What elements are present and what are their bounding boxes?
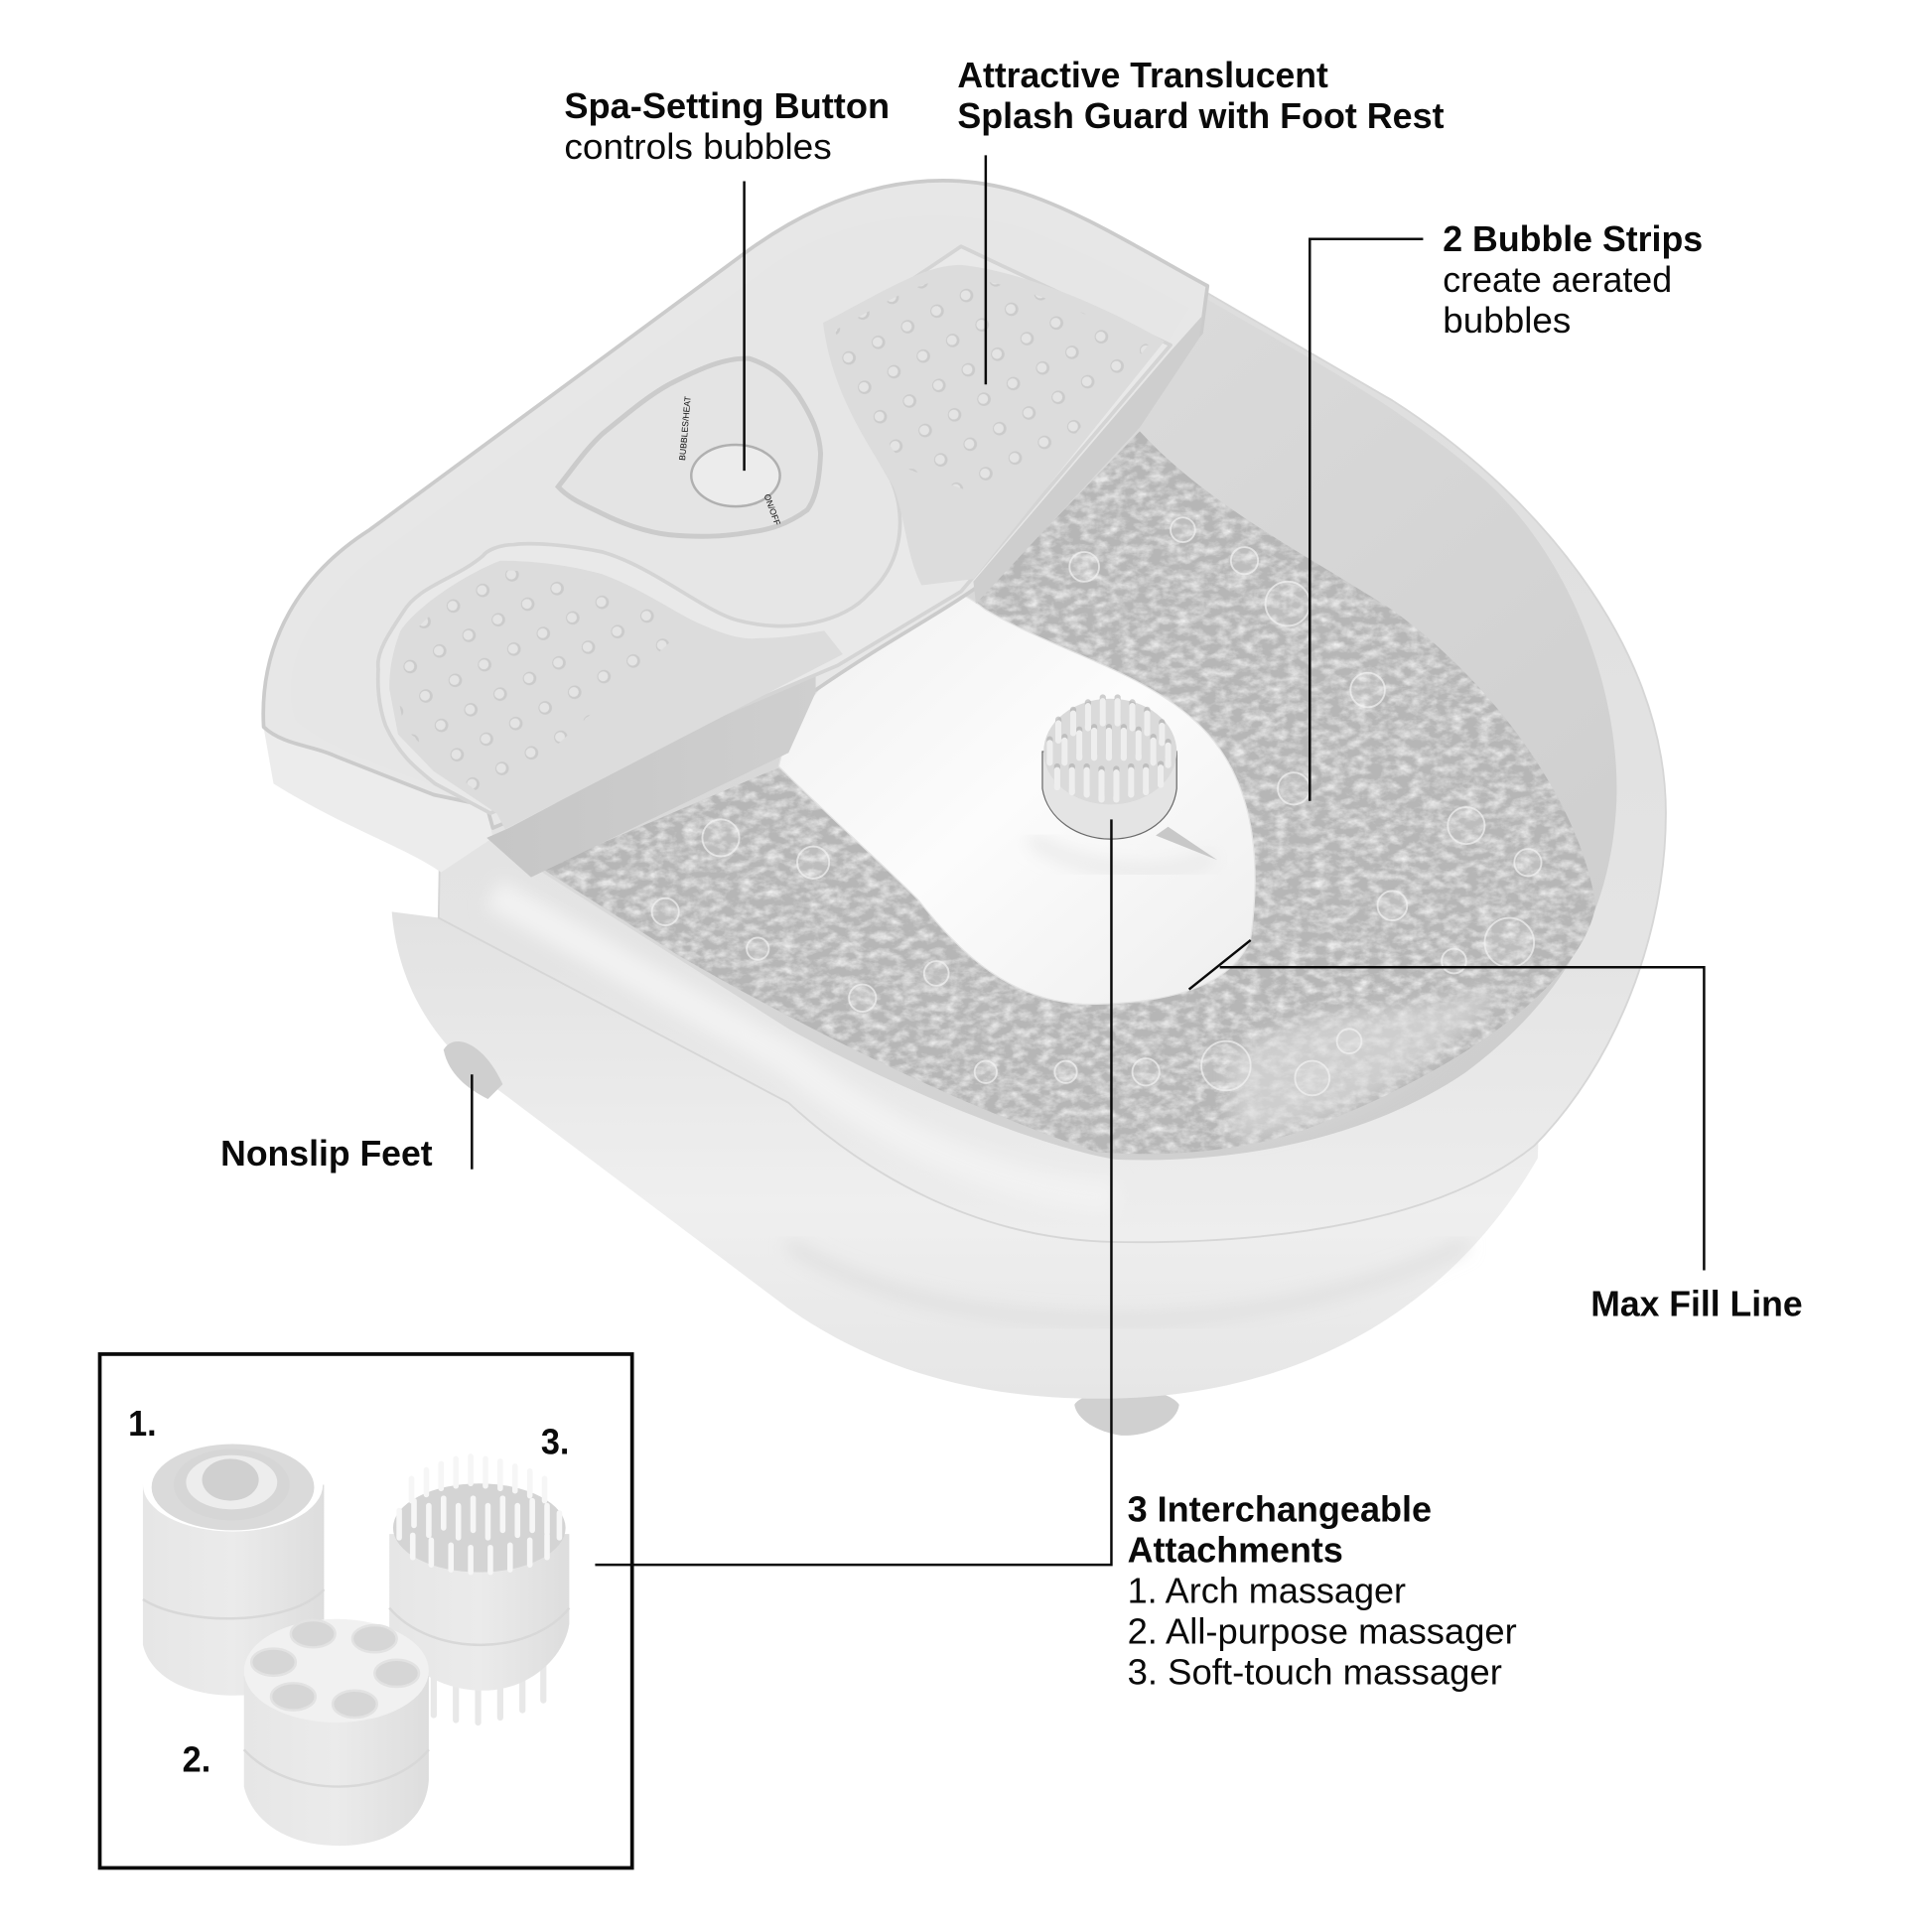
label: interchangeable attachments: Attachments [1128, 1530, 1343, 1571]
lid top face [291, 215, 1189, 801]
button on/off label: ON/OFF [762, 492, 782, 526]
foot: front nonslip foot [1074, 1390, 1179, 1436]
left foot rest pad [389, 561, 843, 829]
water highlight foam [1232, 986, 1503, 1140]
leader line: spa-setting button [744, 181, 746, 471]
translucent splash guard lid [262, 181, 1207, 878]
label: interchangeable attachments: 1. Arch massager [1128, 1571, 1406, 1611]
leader line: splash guard [985, 155, 987, 384]
roller bristle shadows [1049, 697, 1169, 796]
label: splash guard: Attractive Translucent [957, 55, 1328, 95]
attachment 3: soft-touch massager [389, 1456, 569, 1723]
central massage pedestal [778, 584, 1255, 1004]
inset frame [100, 1354, 632, 1867]
label: spa-setting button: controls bubbles [564, 126, 832, 167]
label: bubble strips: bubbles [1443, 300, 1571, 341]
lid side skirt [262, 721, 492, 873]
label: nonslip feet: Nonslip Feet [220, 1133, 433, 1173]
bubbles [652, 517, 1542, 1095]
roller bristles [1049, 701, 1169, 799]
attachments inset box [100, 1354, 632, 1867]
spa-setting button [677, 395, 780, 506]
inset number 2: 2. [183, 1739, 210, 1780]
roller cylinder [1042, 752, 1176, 839]
button small labels: BUBBLES/HEAT [677, 395, 693, 461]
lid outer shell [263, 181, 1207, 828]
label: interchangeable attachments: 3. Soft-touch massager [1128, 1652, 1502, 1693]
leader line: attachments [595, 819, 1111, 1565]
bubbling water [542, 431, 1595, 1154]
pedestal shadow ring [1031, 838, 1213, 871]
roller brush head [1043, 699, 1176, 804]
lid front face band right [973, 316, 1202, 604]
label: interchangeable attachments [1128, 1489, 1517, 1693]
label: spa-setting button: Spa-Setting Button [564, 85, 890, 126]
leader line: nonslip feet [471, 1074, 473, 1170]
lid front face band left [486, 665, 816, 878]
massage roller attachment [1042, 697, 1176, 839]
label: bubble strips: create aerated [1443, 259, 1672, 300]
label: spa-setting button [564, 85, 890, 167]
inset number 1: 1. [128, 1403, 157, 1444]
tub outer rim [439, 290, 1666, 1242]
leader line: bubble strips [1310, 239, 1423, 801]
lip around pad and pod [378, 246, 1171, 813]
right foot rest pad [823, 265, 1165, 586]
label: max fill line: Max Fill Line [1590, 1283, 1803, 1323]
label: bubble strips [1443, 218, 1703, 341]
tub body seam shadow [788, 1244, 1466, 1320]
inset number 3: 3. [541, 1421, 569, 1461]
leader line: max fill line [1189, 940, 1704, 1271]
attachment 1: arch massager [143, 1438, 324, 1696]
tub lower body [392, 911, 1540, 1399]
pedestal groove [1156, 827, 1217, 860]
attachment 2: all-purpose massager [244, 1619, 429, 1846]
basin inner wall [542, 296, 1616, 1160]
label: splash guard: Splash Guard with Foot Rest [957, 95, 1445, 136]
control pod plate [558, 358, 821, 536]
label: interchangeable attachments: 2. All-purpose massager [1128, 1611, 1517, 1652]
label: interchangeable attachments: 3 Interchangeable [1128, 1489, 1432, 1530]
label: bubble strips: 2 Bubble Strips [1443, 218, 1703, 259]
rim front highlight [492, 894, 1115, 1197]
label: splash guard [957, 55, 1445, 136]
foot: rear left nonslip foot [444, 1041, 502, 1099]
